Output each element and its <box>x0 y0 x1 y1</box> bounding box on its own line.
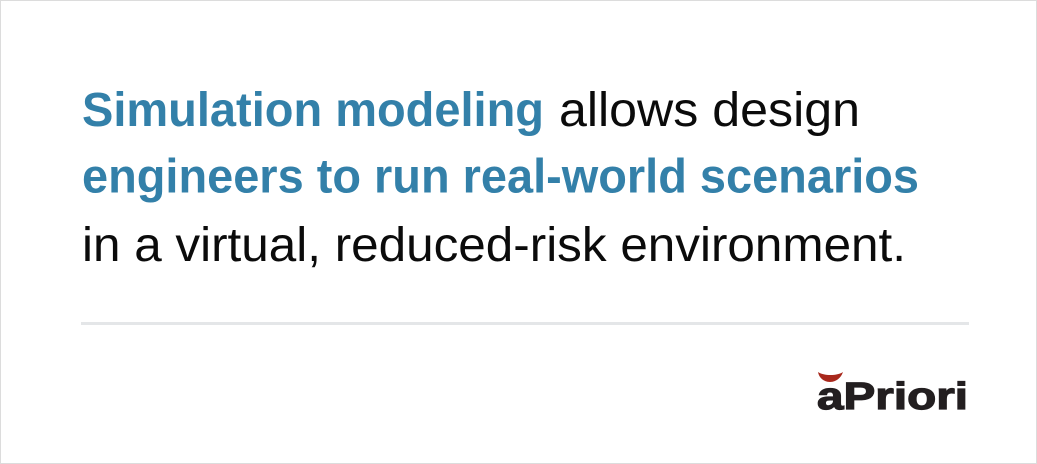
line 3: in a virtual, reduced-risk environment. <box>82 219 906 272</box>
line 1: allows design <box>559 84 860 137</box>
logo: aPriori <box>817 372 968 418</box>
logo red swoosh <box>818 372 843 382</box>
logo wordmark: aPriori <box>817 376 968 418</box>
line 1: Simulation modeling <box>82 84 544 137</box>
statement text <box>82 84 919 272</box>
line 1 <box>82 84 860 137</box>
line 2: engineers to run real-world scenarios <box>82 150 919 204</box>
